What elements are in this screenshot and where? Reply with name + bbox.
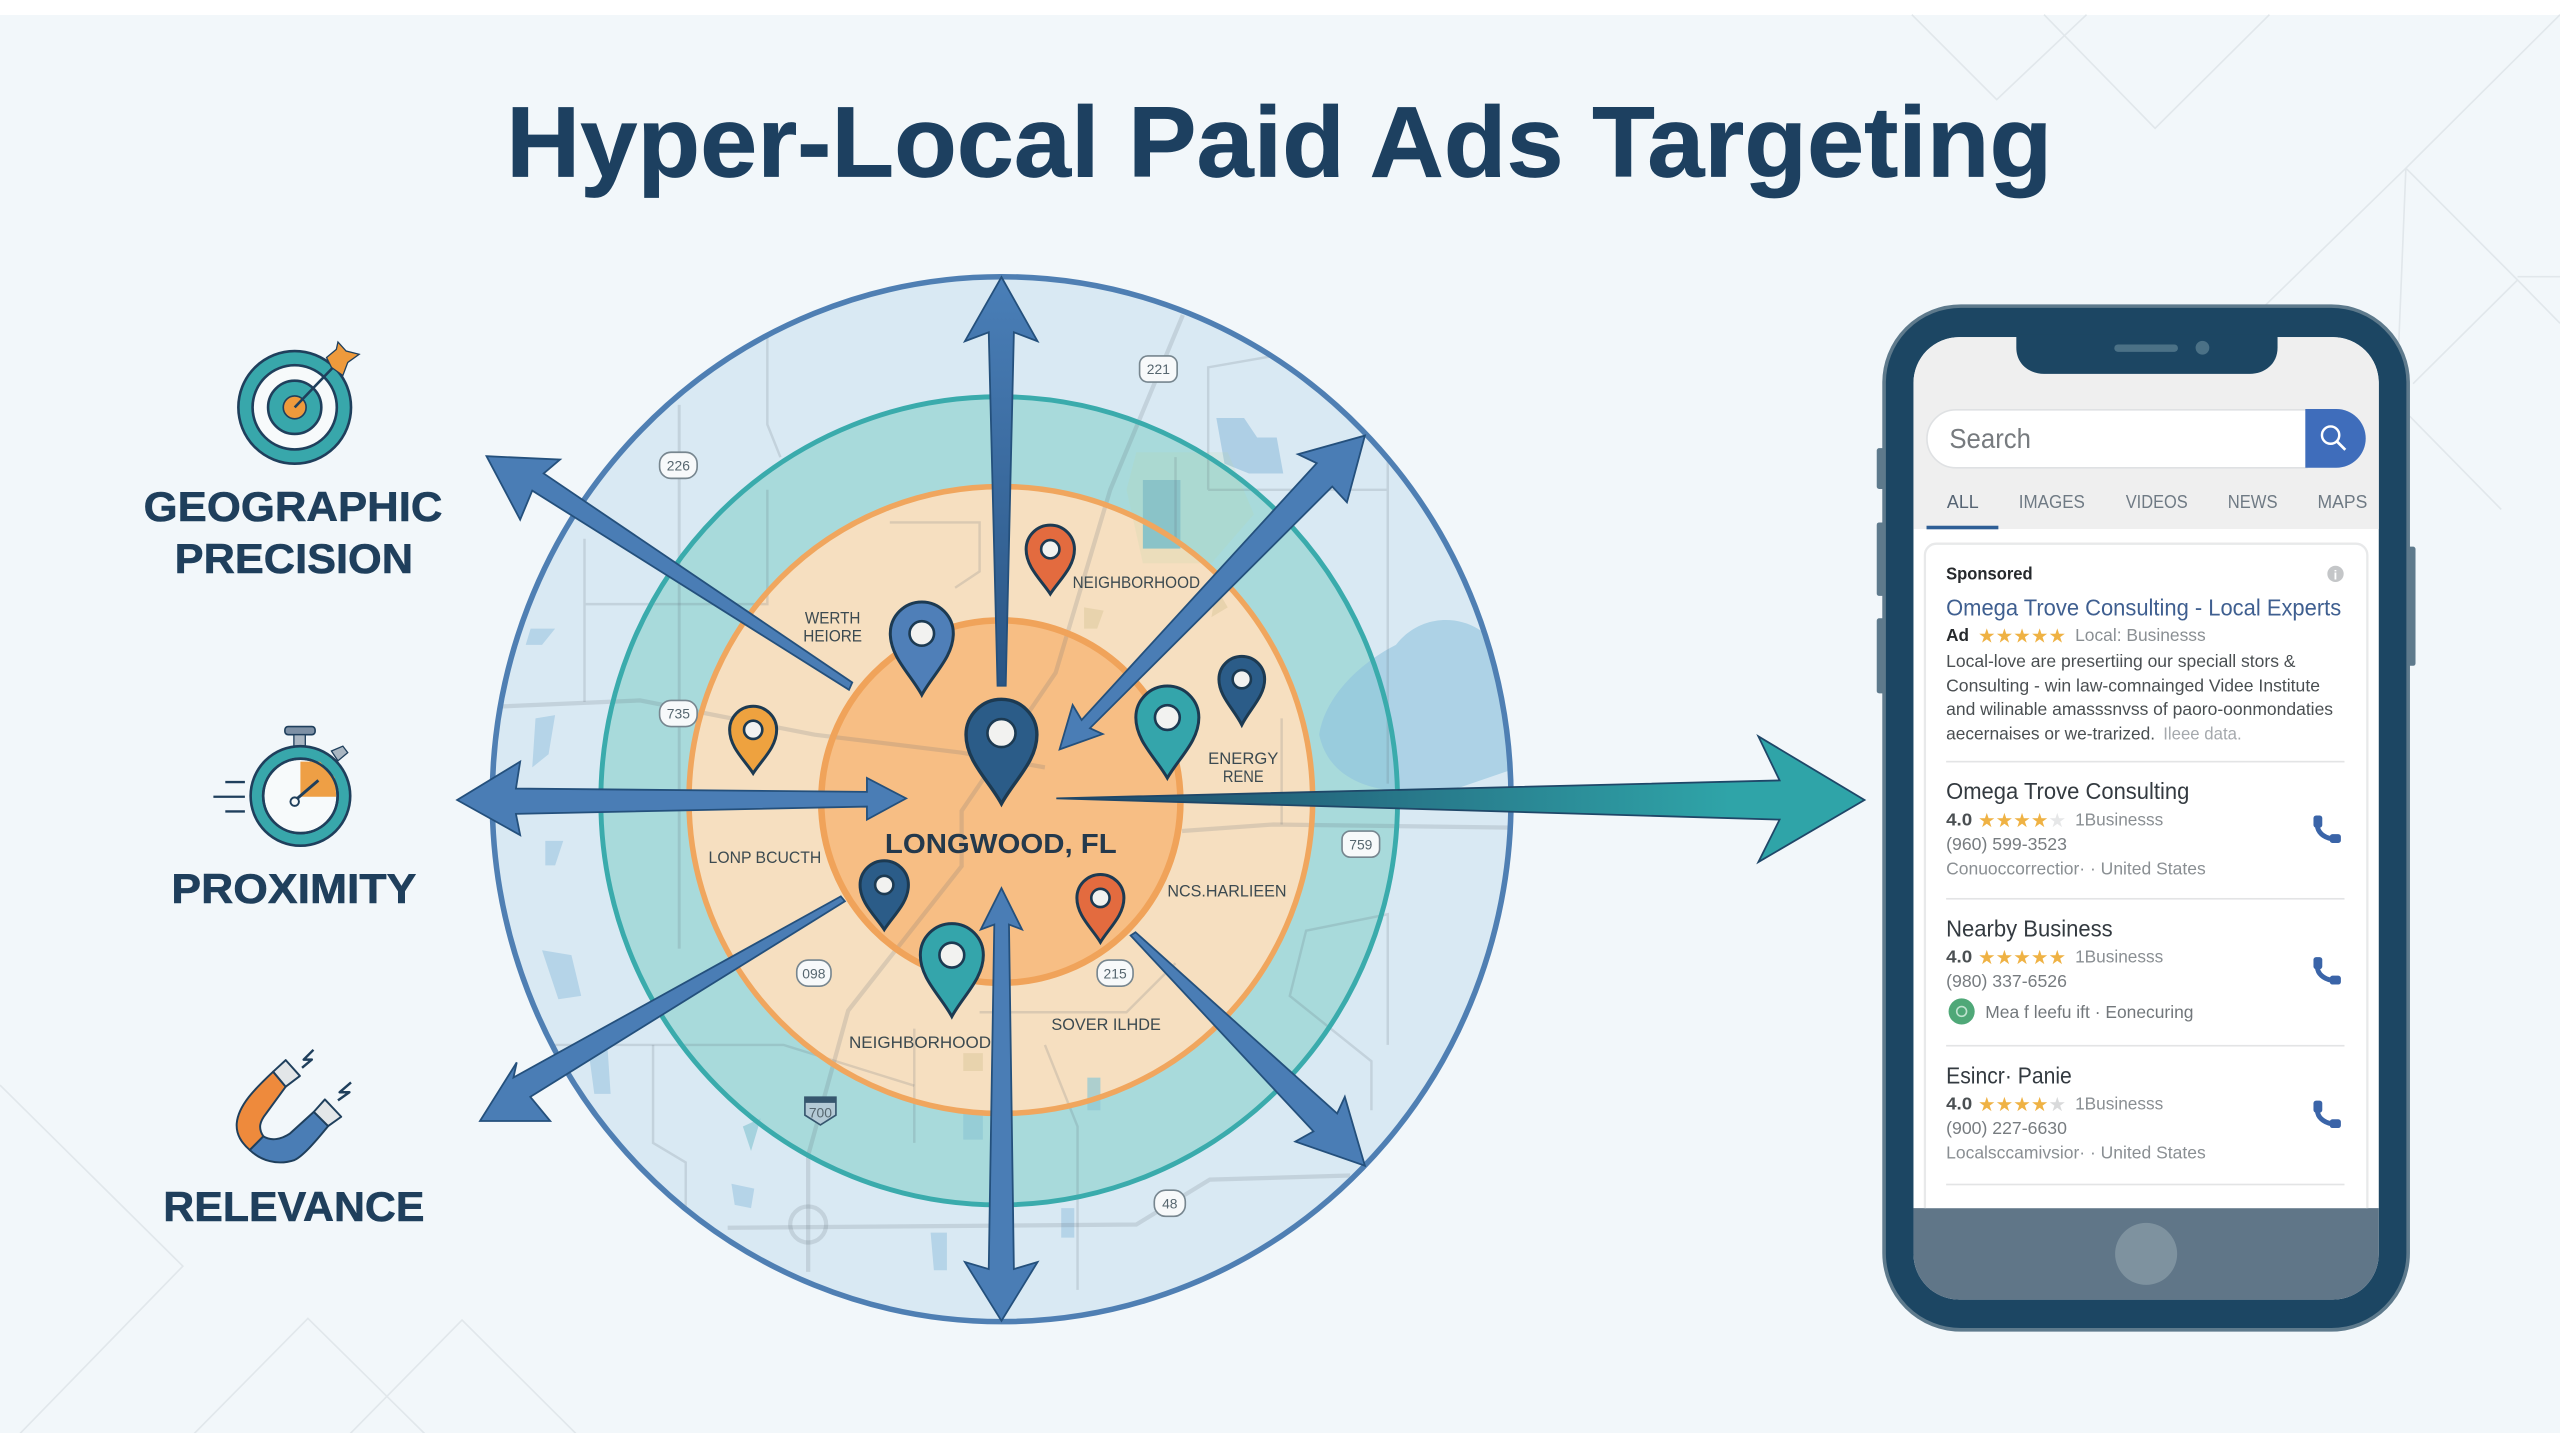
listing: Nearby Business [1946, 915, 2344, 1047]
map labels: NEIGHBORHOOD [1073, 574, 1200, 592]
listing: Esincr Panie: Esincr· Panie [1946, 1062, 2072, 1088]
listing: Esincr Panie: ★ [2048, 1093, 2066, 1116]
label: geographic: GEOGRAPHIC [144, 483, 442, 530]
teal zone [601, 397, 1398, 1205]
result tabs [1927, 491, 2367, 529]
road shields: 48 [1162, 1196, 1178, 1212]
search bar [1927, 409, 2366, 468]
listing: Nearby Business: ★★★★★ [1978, 946, 2066, 969]
listing: Omega Trove Consulting: Conuoccorrectior· · United States [1946, 858, 2206, 878]
sponsored ad: Omega Trove Consulting - Local Experts [1946, 595, 2341, 621]
sponsored ad: ★★★★★ [1978, 624, 2066, 647]
arrows radiating [457, 277, 1365, 1321]
listing: Omega Trove Consulting: (960) 599-3523 [1946, 834, 2067, 854]
listing: Nearby Business: (980) 337-6526 [1946, 971, 2067, 991]
sponsored ad: i [2334, 568, 2337, 583]
map pins [730, 525, 1265, 1017]
sponsored ad: Consulting - win law-comnainged Videe Institute [1946, 675, 2320, 695]
phone body [1884, 306, 2408, 1330]
map labels: NEIGHBORHOOD [849, 1034, 991, 1052]
panel: relevance [163, 1050, 424, 1230]
road shields: 098 [802, 965, 826, 981]
center label: LONGWOOD, FL [885, 828, 1117, 859]
panel: proximity [171, 727, 417, 912]
map labels: SOVER ILHDE [1051, 1016, 1161, 1034]
label: precision: PRECISION [175, 535, 413, 582]
result tabs: IMAGES [2019, 491, 2085, 512]
sponsored ad [1946, 564, 2344, 762]
listing: Nearby Business: 1Businesss [2075, 946, 2163, 966]
label: relevance: RELEVANCE [163, 1183, 424, 1230]
icon: phone call [2313, 957, 2341, 985]
road shields: 700 [809, 1105, 832, 1121]
map water and parks [526, 418, 1283, 1270]
icon: phone call [2313, 816, 2341, 843]
map roads [487, 315, 1518, 1290]
sponsored ad: Ad [1946, 625, 1969, 645]
sponsored ad: aecernaises or we-trarized. [1946, 724, 2155, 744]
orange zone [689, 487, 1313, 1113]
phone mockup [1877, 306, 2416, 1330]
result tabs: MAPS [2318, 491, 2367, 512]
listing: Omega Trove Consulting: 1Businesss [2075, 809, 2163, 829]
result tabs: NEWS [2228, 491, 2278, 512]
listing: Esincr Panie: Localsccamivsior· · United States [1946, 1142, 2206, 1162]
map labels: RENE [1223, 768, 1264, 786]
map labels: NCS.HARLIEEN [1167, 882, 1287, 900]
icon: phone call [2313, 1101, 2341, 1128]
listing: Omega Trove Consulting: 4.0 [1946, 809, 1972, 829]
listing: Esincr Panie: 4.0 [1946, 1093, 1972, 1113]
road shields: 226 [667, 458, 690, 474]
listing: Omega Trove Consulting: ★ [2048, 809, 2066, 832]
label: proximity: PROXIMITY [171, 865, 417, 912]
panel: geographic precision [144, 342, 442, 582]
icon: stopwatch [213, 727, 350, 846]
map labels: ENERGY [1208, 750, 1278, 768]
arrow: teal to phone [1056, 736, 1864, 862]
outer zone [492, 277, 1511, 1322]
listing: Nearby Business: Mea f leefu ift · Eonecuring [1985, 1002, 2193, 1022]
listing: Omega Trove Consulting: Omega Trove Consulting [1946, 778, 2189, 804]
sponsored ad: and wilinable amasssnvss of paoro-oonmondaties [1946, 699, 2333, 719]
map labels [709, 574, 1287, 1052]
lake [1319, 620, 1518, 792]
road shields: 215 [1104, 965, 1127, 981]
icon: target with arrow [238, 342, 359, 464]
phone screen [1913, 337, 2379, 1300]
home button [2115, 1223, 2177, 1285]
sponsored ad: Local-love are presertiing our speciall stors & [1946, 651, 2296, 671]
listing: Esincr Panie: ★★★★ [1978, 1093, 2048, 1116]
map labels: WERTH [805, 610, 860, 628]
sponsored ad: Sponsored [1946, 564, 2033, 584]
sponsored ad: Ileee data. [2163, 724, 2242, 744]
listing: Omega Trove Consulting: ★★★★ [1978, 809, 2048, 832]
sponsored ad: Local: Businesss [2075, 625, 2206, 645]
map labels: HEIORE [803, 628, 862, 646]
results card [1925, 544, 2367, 1208]
listing: Omega Trove Consulting [1946, 778, 2344, 900]
listing: Nearby Business: Nearby Business [1946, 915, 2113, 941]
listing: Esincr Panie: (900) 227-6630 [1946, 1118, 2067, 1138]
listing: Nearby Business: 4.0 [1946, 946, 1972, 966]
result tabs: VIDEOS [2126, 491, 2188, 512]
ring borders [492, 277, 1511, 1322]
listing: Esincr Panie: 1Businesss [2075, 1093, 2163, 1113]
search bar: Search [1949, 423, 2031, 454]
result tabs: ALL [1947, 491, 1979, 512]
road shields: 759 [1349, 836, 1373, 852]
title: Hyper-Local Paid Ads Targeting [506, 86, 2052, 198]
phone side buttons [1877, 448, 2416, 693]
phone notch [2016, 335, 2278, 374]
map labels: LONP BCUCTH [709, 849, 821, 867]
listing: Esincr Panie [1946, 1062, 2344, 1185]
icon: magnet [237, 1050, 351, 1162]
radial map [457, 277, 1518, 1322]
road shields: 735 [667, 706, 690, 722]
road shields [660, 356, 1380, 1216]
road shields: 221 [1147, 361, 1170, 377]
central zone [821, 620, 1180, 983]
